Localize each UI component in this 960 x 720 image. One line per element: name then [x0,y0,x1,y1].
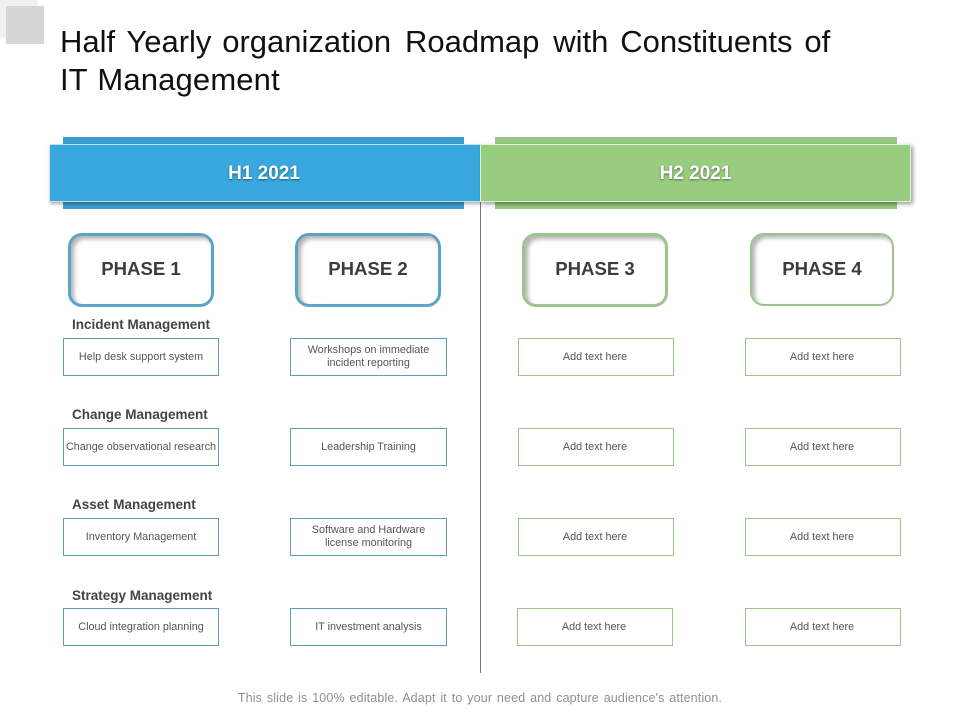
title: IT Management [60,62,280,97]
vertical divider [480,200,481,673]
box: row 3 col 4 [745,518,901,556]
box: change research: Change observational research [66,440,216,452]
banner: H2 2021: H2 2021 [660,163,731,184]
box: row 2 col 3: Add text here [563,440,627,452]
box: row 1 col 4: Add text here [790,350,854,362]
heading: asset management: Asset Management [72,497,196,512]
box: row 2 col 3 [518,428,674,466]
box: IT investment: IT investment analysis [315,620,422,632]
title: Half Yearly organization Roadmap with Constituents of [60,24,830,59]
corner square [6,6,44,44]
box: workshops: Workshops on immediate [308,344,429,356]
box: inventory [63,518,219,556]
phase 3: PHASE 3 [555,258,635,279]
box: row 1 col 3: Add text here [563,350,627,362]
box: row 3 col 4: Add text here [790,530,854,542]
phase 1 [68,233,214,307]
box: row 3 col 3 [518,518,674,556]
box: help desk [63,338,219,376]
box: row 1 col 4 [745,338,901,376]
box: row 4 col 3 [517,608,673,646]
phase 3 [522,233,668,307]
box: row 4 col 3: Add text here [562,620,626,632]
banner: H2 2021 [480,144,911,202]
phase 1: PHASE 1 [101,258,181,279]
box: help desk: Help desk support system [79,350,203,362]
banner: H1 2021 [50,144,481,202]
box: software: license monitoring [325,537,412,549]
back strip: H1 [63,137,464,209]
box: cloud [63,608,219,646]
back strip: H2 [495,137,897,209]
box: row 1 col 3 [518,338,674,376]
box: IT investment [290,608,447,646]
title [60,24,830,97]
phase 2 [295,233,441,307]
heading: strategy management: Strategy Management [72,588,212,603]
box: leadership: Leadership Training [321,440,416,452]
banner: H1 2021: H1 2021 [228,163,300,184]
box: row 4 col 4 [745,608,901,646]
phase 2: PHASE 2 [328,258,408,279]
box: leadership [290,428,447,466]
box: inventory: Inventory Management [86,530,196,542]
heading: change management: Change Management [72,407,208,422]
decorative corner square [0,0,38,38]
heading: incident management: Incident Management [72,317,210,332]
box: workshops: incident reporting [327,357,410,369]
box: row 3 col 3: Add text here [563,530,627,542]
box: software: Software and Hardware [312,524,425,536]
box: software [290,518,447,556]
box: change research [63,428,219,466]
box: row 2 col 4: Add text here [790,440,854,452]
phase 4: PHASE 4 [782,258,862,278]
box: cloud: Cloud integration planning [78,620,204,632]
box: row 2 col 4 [745,428,901,466]
box: workshops [290,338,447,376]
box: row 4 col 4: Add text here [790,620,854,632]
phase 4 [750,233,894,306]
footer note: This slide is 100% editable. Adapt it to your need and capture audience's attention. [238,691,722,705]
